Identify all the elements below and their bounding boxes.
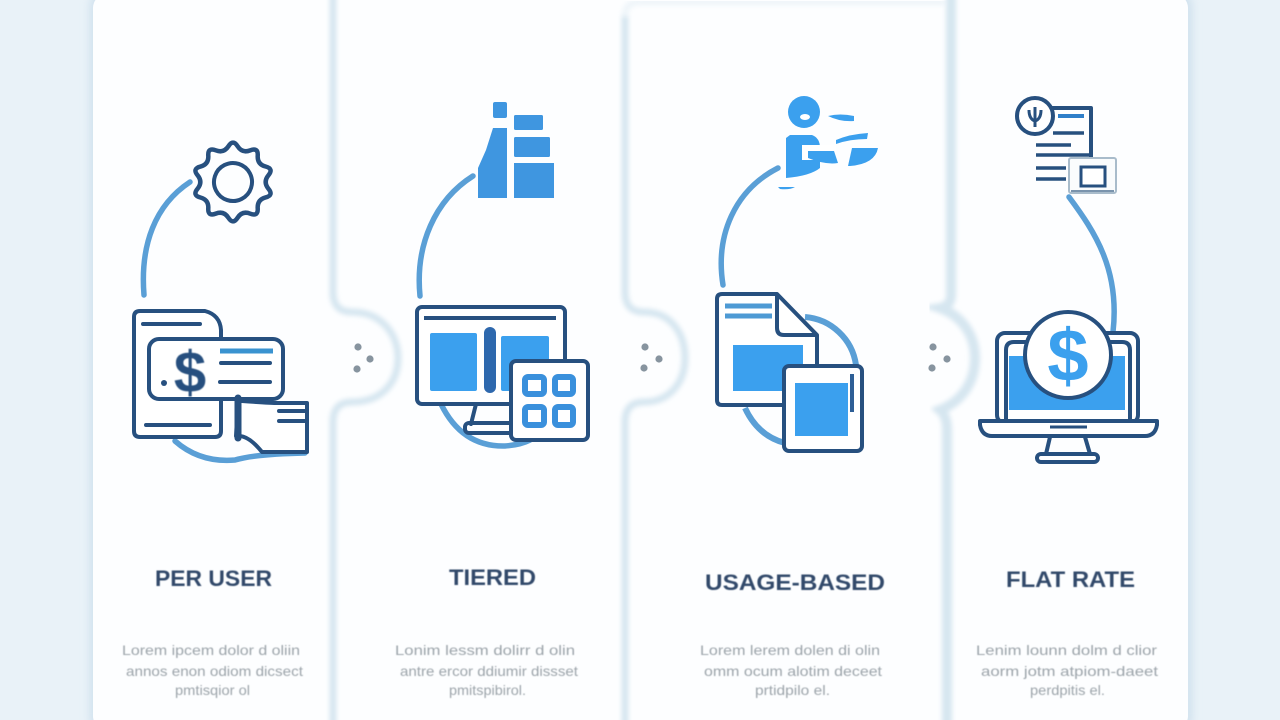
text block: per user: [122, 642, 303, 698]
text block: flat rate: aorm jotm atpiom-daeet: [981, 663, 1158, 679]
panel: flat rate: [976, 98, 1158, 698]
icon: person with device: [778, 96, 878, 189]
icon: monitor and app tile: [417, 307, 588, 446]
text block: tiered: [395, 642, 578, 698]
icon: documents: [717, 294, 862, 451]
heading: tiered: TIERED: [449, 565, 536, 590]
text block: tiered: Lonim lessm dolirr d olin: [395, 642, 575, 658]
panel: per user: [122, 134, 307, 698]
text block: usage-based: Lorem lerem dolen di olin: [700, 642, 880, 658]
icon: payment card and hand: [134, 311, 307, 460]
arrow: person to document: [721, 168, 778, 285]
text block: usage-based: omm ocum alotim deceet: [704, 663, 882, 679]
text block: tiered: pmitspibirol.: [449, 682, 526, 698]
icon: gear: [184, 134, 282, 230]
panel: tiered: [395, 102, 588, 698]
arrow: invoice to laptop: [1069, 197, 1114, 332]
connector tab: usage-based to flat rate: [928, 0, 975, 720]
icon: payment card and hand: $: [174, 340, 206, 405]
connector tab: tiered to usage-based: [625, 2, 945, 720]
text block: usage-based: prtidpilo el.: [755, 682, 830, 698]
text block: per user: pmtisqior ol: [175, 682, 250, 698]
text block: flat rate: perdpitis el.: [1030, 682, 1105, 698]
icon: laptop with dollar: [980, 312, 1157, 462]
heading: flat rate: FLAT RATE: [1006, 567, 1135, 592]
connector tab: per user to tiered: [333, 0, 398, 720]
text block: flat rate: [976, 642, 1158, 698]
heading: usage-based: USAGE-BASED: [705, 570, 885, 595]
text block: tiered: antre ercor ddiumir dissset: [400, 663, 578, 679]
heading: per user: PER USER: [155, 566, 272, 591]
arrow: blocks to monitor: [419, 176, 473, 296]
text block: flat rate: Lenim lounn dolm d clior: [976, 642, 1157, 658]
icon: invoice with badge: [1017, 98, 1116, 193]
text block: per user: Lorem ipcem dolor d oliin: [122, 642, 300, 658]
arrow: gear to payment: [143, 182, 190, 295]
icon: stacked blocks: [478, 102, 554, 198]
panel: usage-based: [700, 96, 885, 698]
text block: usage-based: [700, 642, 882, 698]
text block: per user: annos enon odiom dicsect: [126, 663, 303, 679]
icon: laptop with dollar: $: [1047, 314, 1089, 397]
